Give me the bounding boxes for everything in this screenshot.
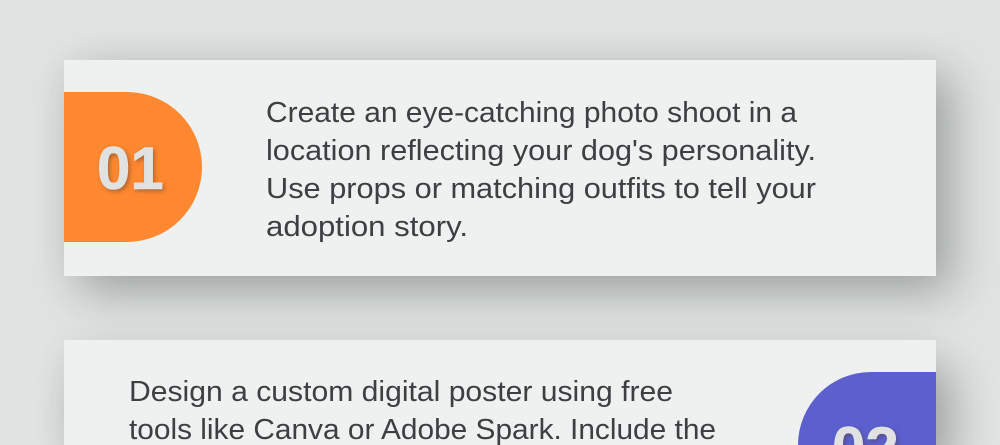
text block: step 02 description: Design a custom digital poster using free [129, 376, 673, 408]
step number 01: 01 [97, 135, 164, 202]
text block: step 01 description [266, 97, 816, 243]
text block: step 01 description: Use props or matching outfits to tell your [266, 173, 816, 205]
badge: purple 02 tab [798, 372, 936, 445]
text block: step 01 description: adoption story. [266, 211, 468, 243]
badge: orange 01 tab [64, 92, 202, 242]
text block: step 01 description: location reflecting your dog's personality. [266, 135, 816, 167]
text block: step 02 description [129, 376, 716, 445]
panel: step 01 card [64, 60, 936, 276]
text block: step 01 description: Create an eye-catching photo shoot in a [266, 97, 798, 129]
panel: step 02 card [64, 340, 936, 445]
